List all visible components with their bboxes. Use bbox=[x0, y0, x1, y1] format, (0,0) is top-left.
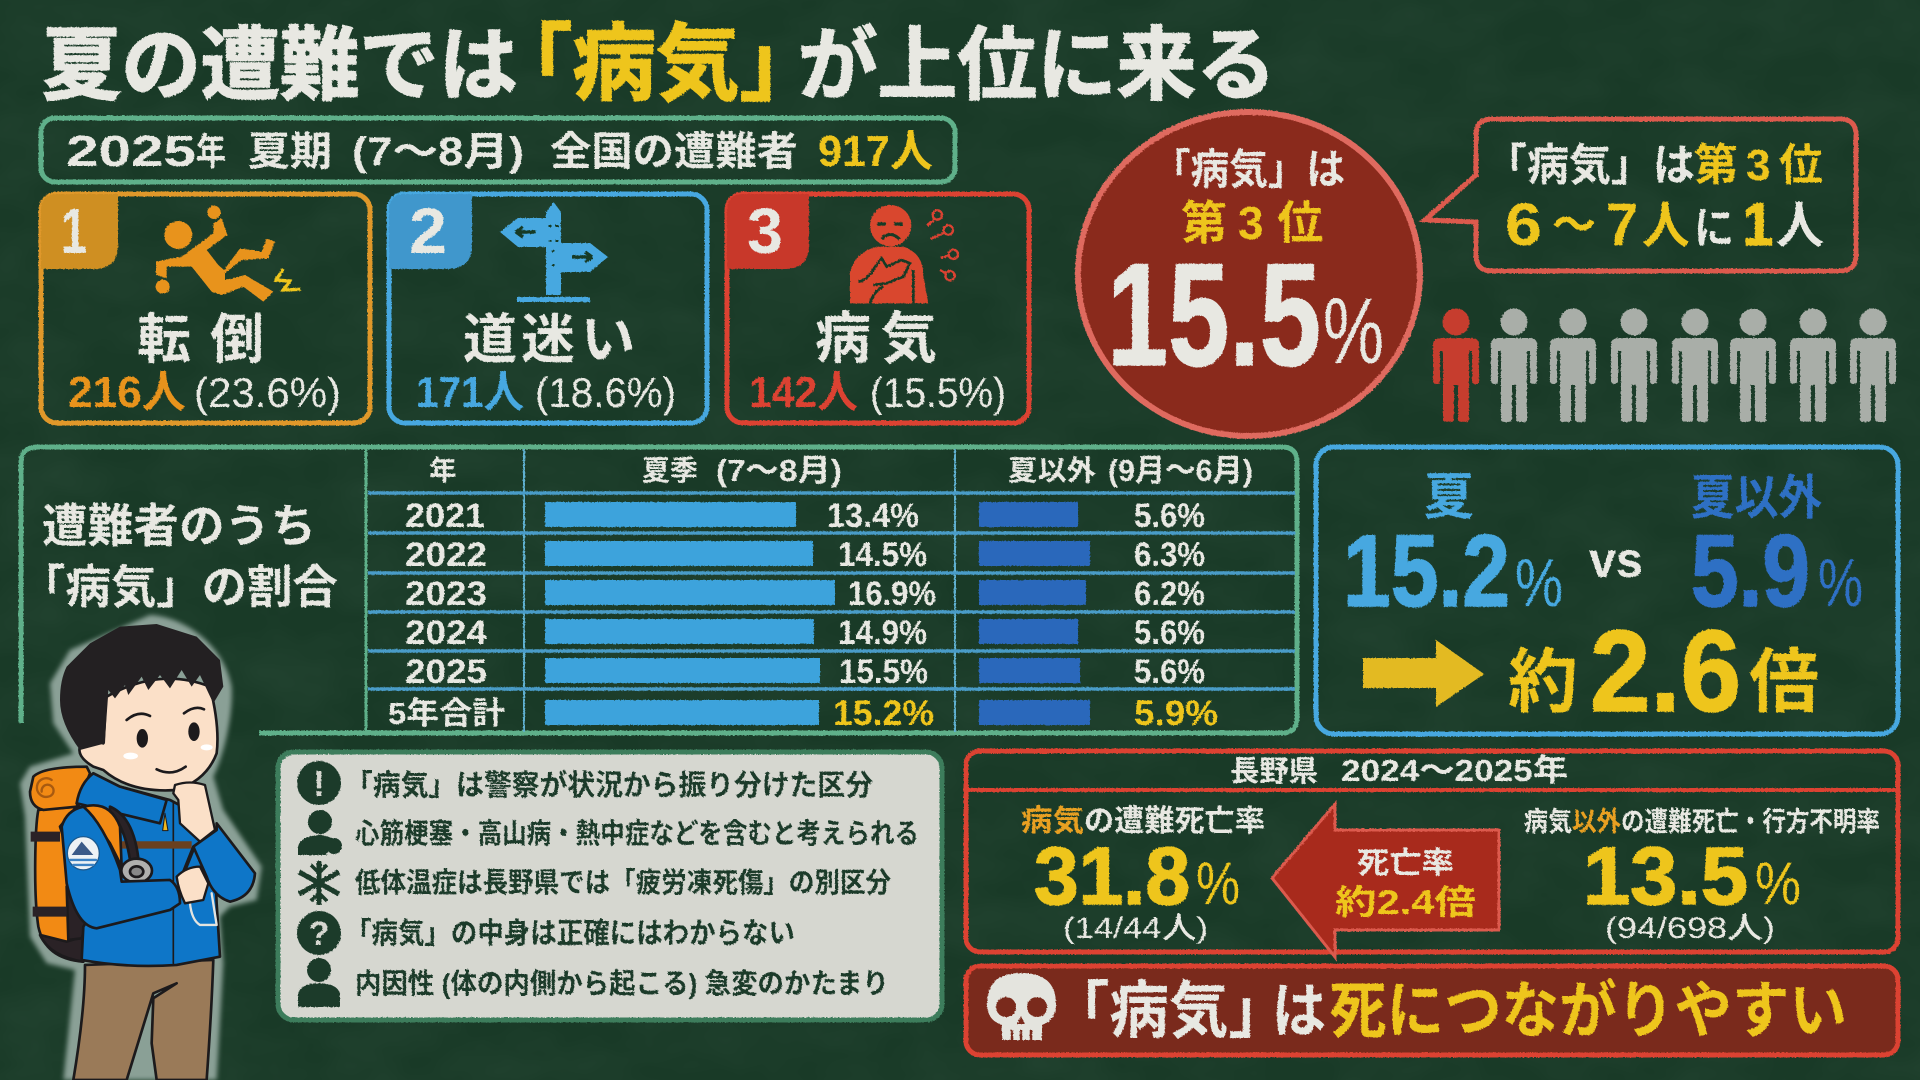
arrow bbox=[1363, 640, 1484, 707]
illness rate: の遭難死亡率 bbox=[1084, 805, 1265, 838]
note 2: 心筋梗塞・高山病・熱中症などを含むと考えられる bbox=[355, 818, 919, 849]
speech bubble: 7 bbox=[1606, 191, 1638, 258]
illness rate: 病気 bbox=[1021, 805, 1084, 838]
circle callout 15.5%: 「病気」は bbox=[1152, 146, 1345, 193]
pants bbox=[73, 960, 213, 1080]
panel header bbox=[1230, 753, 1568, 788]
other rate: (94/698人) bbox=[1605, 912, 1775, 945]
2.6 times: 約 bbox=[1508, 643, 1578, 721]
panel: rank 3 illness: 142人 bbox=[749, 368, 858, 417]
row 2022: 2022 bbox=[405, 536, 487, 574]
icon: question: ? bbox=[309, 915, 329, 953]
row 2025: 15.5% bbox=[839, 653, 928, 691]
header: total victims: (7～8月) bbox=[352, 130, 524, 174]
conclusion banner bbox=[966, 966, 1898, 1055]
panel: summer vs other: 夏以外 bbox=[1691, 472, 1822, 525]
notes panel bbox=[278, 752, 942, 1020]
row 2023: 2023 bbox=[405, 575, 487, 613]
panel: summer vs other: % bbox=[1515, 545, 1563, 621]
speech bubble bbox=[1425, 119, 1856, 271]
conclusion banner: 「病気」 bbox=[1050, 977, 1288, 1046]
row 2021: 5.6% bbox=[1134, 497, 1205, 535]
other rate: % bbox=[1755, 850, 1801, 917]
icon: falling person bbox=[156, 206, 301, 302]
conclusion banner: 死につながりやすい bbox=[1329, 977, 1847, 1046]
other rate bbox=[1524, 807, 1880, 945]
row 2023 bbox=[405, 575, 1205, 613]
icon: exclamation bbox=[297, 761, 341, 805]
icon: skull bbox=[987, 973, 1056, 1040]
shoulder badge bbox=[67, 837, 99, 870]
arrow: 2.4 times bbox=[1272, 804, 1499, 957]
panel: rank 2 lost: 道迷い bbox=[463, 310, 635, 370]
panel: rank 3 illness: 3 bbox=[747, 195, 783, 267]
note 1: 「病気」は警察が状況から振り分けた区分 bbox=[345, 768, 873, 802]
panel: Nagano fatality bbox=[966, 751, 1898, 957]
panel: rank 3 illness: 病気 bbox=[815, 307, 937, 370]
table header: 年 bbox=[429, 455, 457, 486]
icon: signpost bbox=[500, 202, 608, 302]
panel: rank 1 fall: (23.6%) bbox=[194, 369, 341, 416]
speech bubble: 人 bbox=[1776, 198, 1824, 254]
row 2022 bbox=[405, 536, 1205, 574]
panel: rank 1 fall: 転倒 bbox=[137, 310, 264, 370]
panel: rank 2 lost: 2 bbox=[409, 195, 447, 267]
note 4: 「病気」の中身は正確にはわからない bbox=[345, 917, 795, 950]
row five-year total: 5年合計 bbox=[388, 696, 505, 731]
row 2025 bbox=[405, 653, 1205, 691]
panel: rank 2 lost bbox=[389, 194, 707, 423]
panel: rank 1 fall bbox=[41, 194, 370, 423]
panel header: 長野県 bbox=[1230, 756, 1318, 788]
table header: (7～8月) bbox=[716, 453, 842, 488]
panel: summer vs other: 5.9 bbox=[1691, 514, 1810, 628]
speech bubble: ～ bbox=[1552, 201, 1596, 250]
panel: summer vs other: % bbox=[1818, 545, 1863, 621]
panel: rank 1 fall: 216人 bbox=[68, 368, 186, 417]
other rate: 以外 bbox=[1572, 807, 1621, 837]
title: 「病気」 bbox=[489, 17, 823, 111]
panel: rank 1 fall: 1 bbox=[61, 195, 87, 267]
panel heading: 遭難者のうち bbox=[42, 500, 316, 552]
illness rate: (14/44人) bbox=[1063, 912, 1208, 945]
speech bubble: 第3位 bbox=[1694, 141, 1823, 190]
outline halo bbox=[20, 615, 262, 1080]
row 2024: 14.9% bbox=[838, 614, 927, 652]
table header bbox=[429, 453, 1253, 488]
icon: person bbox=[298, 958, 340, 1007]
arrow: 2.4 times: 死亡率 bbox=[1357, 847, 1454, 880]
header: total victims bbox=[41, 118, 955, 182]
conclusion banner: は bbox=[1272, 978, 1326, 1045]
panel: summer vs other: vs bbox=[1589, 532, 1643, 588]
header: total victims: 夏期 bbox=[248, 130, 332, 174]
header: total victims: 全国の遭難者 bbox=[550, 130, 798, 174]
panel: summer vs other bbox=[1316, 447, 1898, 736]
circle callout 15.5% bbox=[1078, 112, 1420, 436]
circle callout 15.5%: 第3位 bbox=[1181, 197, 1323, 249]
speech bubble: 「病気」は bbox=[1485, 141, 1695, 190]
row 2023: 16.9% bbox=[848, 575, 936, 613]
arrow: 2.4 times: 約2.4倍 bbox=[1335, 884, 1476, 922]
circle callout 15.5%: 15.5 bbox=[1107, 233, 1321, 396]
panel: rank 3 illness: (15.5%) bbox=[870, 369, 1006, 416]
row 2025: 5.6% bbox=[1134, 653, 1205, 691]
character: hiker thinking bbox=[20, 615, 262, 1080]
table header: 夏季 bbox=[642, 455, 698, 486]
2.6 times bbox=[1508, 606, 1819, 736]
speech bubble: 6 bbox=[1505, 191, 1542, 258]
title bbox=[42, 17, 1276, 111]
hand at chin bbox=[173, 782, 215, 842]
row 2024: 5.6% bbox=[1134, 614, 1205, 652]
row 2022: 14.5% bbox=[838, 536, 927, 574]
other rate: の遭難死亡・行方不明率 bbox=[1621, 807, 1880, 837]
icon: exclamation: ! bbox=[313, 763, 325, 804]
other rate: 13.5 bbox=[1583, 831, 1748, 922]
header: total victims: 2025 bbox=[66, 127, 196, 176]
row 2021: 13.4% bbox=[827, 497, 919, 535]
speech bubble: に bbox=[1694, 204, 1734, 253]
row five-year total: 15.2% bbox=[833, 694, 934, 733]
icon: person in pain bbox=[850, 205, 958, 303]
note 5: 内因性 (体の内側から起こる) 急変のかたまり bbox=[355, 968, 889, 999]
panel: rank 2 lost: (18.6%) bbox=[535, 369, 676, 416]
illness rate: 31.8 bbox=[1034, 831, 1190, 922]
illness rate bbox=[1021, 805, 1265, 945]
speech bubble: 1 bbox=[1743, 191, 1773, 258]
panel: summer vs other: 夏 bbox=[1424, 469, 1474, 525]
panel header: 2024～2025年 bbox=[1341, 753, 1568, 788]
circle callout 15.5%: % bbox=[1323, 278, 1384, 383]
row 2024 bbox=[405, 614, 1205, 652]
table header: (9月～6月) bbox=[1108, 453, 1253, 488]
row 2022: 6.3% bbox=[1134, 536, 1205, 574]
panel: share of illness table bbox=[20, 447, 1297, 733]
2.6 times: 2.6 bbox=[1590, 606, 1741, 736]
header: total victims: 年 bbox=[196, 132, 226, 174]
lower hand bbox=[177, 867, 208, 903]
row 2023: 6.2% bbox=[1134, 575, 1205, 613]
backpack bbox=[30, 767, 90, 962]
row five-year total bbox=[388, 694, 1218, 733]
icon: person with check bbox=[298, 810, 342, 855]
panel heading: 「病気」の割合 bbox=[20, 561, 338, 613]
icon: question bbox=[297, 911, 341, 955]
row 2025: 2025 bbox=[405, 653, 487, 691]
row five-year total: 5.9% bbox=[1134, 694, 1218, 733]
illness rate: % bbox=[1196, 850, 1240, 917]
header: total victims: 917人 bbox=[818, 127, 933, 176]
jacket bbox=[62, 773, 255, 966]
table header: 夏以外 bbox=[1008, 455, 1096, 486]
panel heading bbox=[20, 500, 338, 613]
row 2021: 2021 bbox=[405, 497, 485, 535]
head bbox=[60, 624, 223, 790]
title: 夏の遭難では bbox=[42, 21, 518, 110]
note 3: 低体温症は長野県では「疲労凍死傷」の別区分 bbox=[355, 867, 891, 898]
row 2021 bbox=[405, 497, 1205, 535]
row 2024: 2024 bbox=[405, 614, 487, 652]
2.6 times: 倍 bbox=[1749, 643, 1819, 721]
panel: summer vs other: 15.2 bbox=[1343, 514, 1510, 628]
icon: snowflake bbox=[299, 861, 339, 905]
title: が上位に来る bbox=[798, 21, 1276, 110]
panel: rank 3 illness bbox=[727, 194, 1029, 423]
speech bubble: 人 bbox=[1642, 198, 1690, 254]
panel: rank 2 lost: 171人 bbox=[416, 368, 524, 417]
other rate: 病気 bbox=[1524, 807, 1572, 837]
pictogram: 1 in 7 people bbox=[1433, 308, 1896, 422]
